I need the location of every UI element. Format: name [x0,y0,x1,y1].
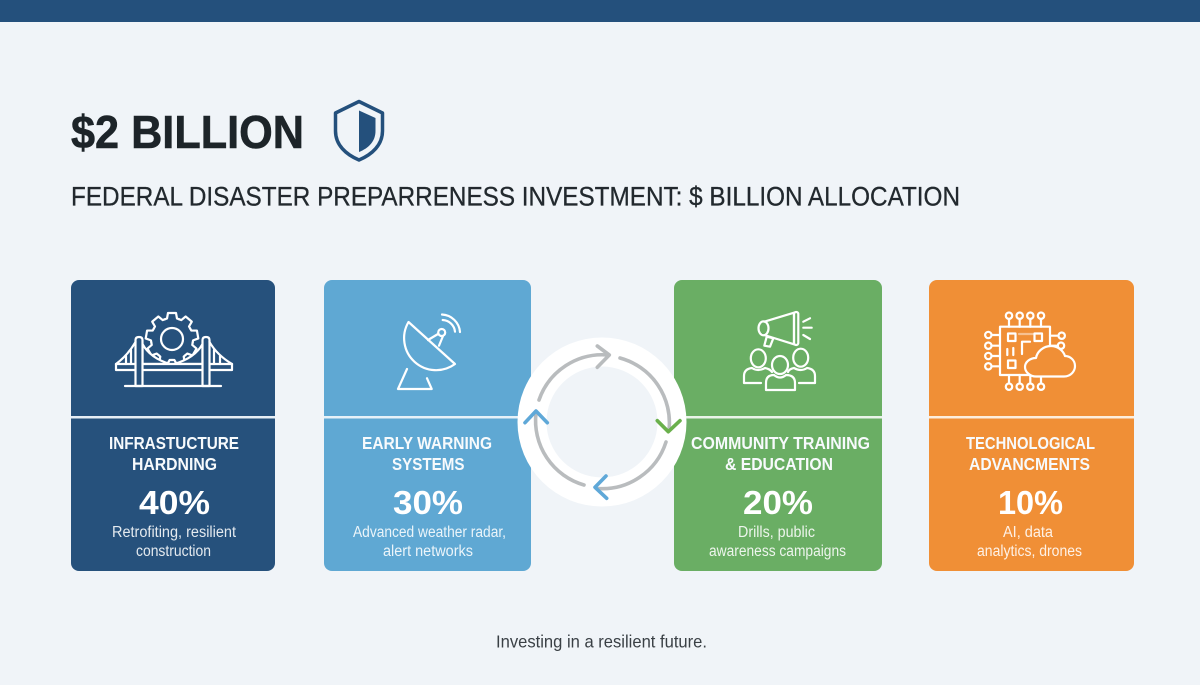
description: construction [136,543,211,560]
icon: satellite dish [398,314,460,389]
description: Advanced weather radar, [353,524,506,541]
subtitle: FEDERAL DISASTER PREPARRENESS INVESTMENT: $ BILLION ALLOCATION [71,182,960,212]
percentage: 40% [139,484,210,521]
description: Drills, public [738,524,815,541]
icon: megaphone and people [744,312,815,390]
arrow: right [620,358,680,432]
panel: infrastructure hardening [71,280,275,571]
percentage: 20% [743,484,813,521]
heading: HARDNING [132,454,217,474]
heading: EARLY WARNING [362,433,492,453]
cycle diagram [518,338,686,506]
heading: SYSTEMS [392,454,464,474]
description: awareness campaigns [709,543,846,560]
panel: community training and education [674,280,882,571]
description: AI, data [1003,524,1053,541]
heading: & EDUCATION [725,454,833,474]
footer tagline: Investing in a resilient future. [496,632,707,652]
top banner [0,0,1200,22]
heading: COMMUNITY TRAINING [691,433,870,453]
icon: chip and cloud [985,312,1075,390]
heading [966,433,1095,474]
heading: TECHNOLOGICAL [966,433,1095,453]
description [709,524,846,560]
title: $2 BILLION [71,106,304,158]
panel: early warning systems [324,280,531,571]
arrow: bottom [595,442,666,498]
arrow: left [525,411,584,485]
percentage: 10% [998,484,1063,521]
arrow: top [539,346,609,400]
heading: INFRASTUCTURE [109,433,239,453]
heading [691,433,870,474]
description [977,524,1082,560]
description: analytics, drones [977,543,1082,560]
icon: bridge and gear [116,313,232,386]
description: Retrofiting, resilient [112,524,237,541]
heading [362,433,492,474]
description: alert networks [383,543,473,560]
description [112,524,237,560]
description [353,524,506,560]
heading [109,433,239,474]
icon: shield [336,102,382,160]
percentage: 30% [393,484,463,521]
heading: ADVANCMENTS [969,454,1090,474]
panel: technological advancements [929,280,1134,571]
